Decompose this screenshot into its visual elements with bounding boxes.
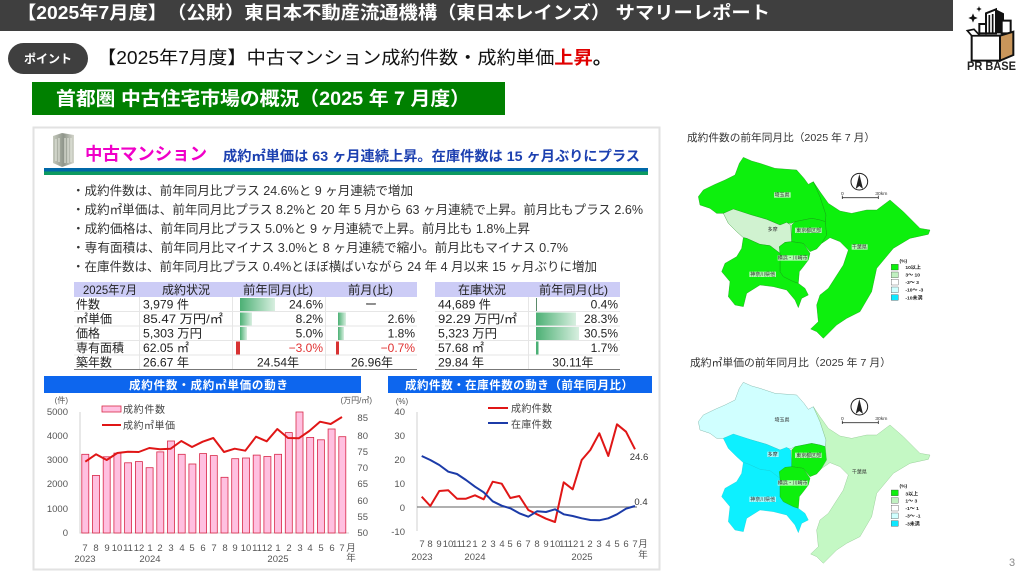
axis labels: 月 (638, 539, 648, 550)
chart: contracts and inventory year over year (388, 376, 652, 563)
axis labels: 2 (286, 543, 292, 554)
table: contract status: 築年数 (76, 354, 112, 370)
icon: north compass and scale (841, 173, 887, 199)
table: inventory status: 30.5% (584, 326, 618, 340)
icon: apartment building (53, 133, 74, 167)
point badge (8, 43, 88, 74)
axis labels: 11 (252, 543, 262, 554)
table: contract status: 2.6% (388, 312, 415, 326)
value labels: 0.4 (634, 497, 648, 508)
region names: 横浜・川崎市 (778, 480, 808, 487)
table: inventory status: 28.3% (584, 312, 618, 326)
region names: 神奈川県他 (750, 496, 775, 503)
region names: 横浜・川崎市 (778, 255, 808, 262)
panel heading: 中古マンション (85, 144, 207, 164)
axis labels: 70 (357, 463, 368, 474)
axis labels: 2025 (571, 552, 593, 563)
axis labels: 6 (200, 543, 206, 554)
axis labels: 1 (147, 543, 153, 554)
legend (488, 402, 552, 431)
table: contract status: −3.0% (289, 341, 323, 355)
region names: 埼玉県 (775, 417, 789, 424)
table: contract status: 26.96年 (351, 356, 393, 370)
axis labels: 2025 (267, 554, 289, 565)
map legend: (%) (899, 484, 908, 490)
map legend: 3～ 10 (905, 273, 920, 279)
table: contract status: 8.2% (296, 312, 323, 326)
table: contract status: 26.67 年 (143, 356, 189, 370)
axis labels: 30 (394, 431, 405, 442)
legend: 成約㎡単価 (123, 419, 175, 432)
axis labels: 12 (461, 539, 471, 550)
axis labels: 5 (189, 543, 195, 554)
page number: 3 (1009, 557, 1015, 569)
axis labels: 3 (168, 543, 174, 554)
value labels (630, 452, 648, 508)
axis labels: 年 (346, 552, 356, 564)
summary bullets: ・在庫件数は、前年同月比プラス 0.4%とほぼ横ばいながら 24 年 4 月以来 15 ヶ月ぶりに増加 (72, 259, 597, 274)
table: contract status: 2025年7月 (83, 283, 137, 297)
table: contract status: 62.05 ㎡ (143, 341, 189, 355)
summary bullets: ・専有面積は、前年同月比マイナス 3.0%と 8 ヶ月連続で縮小。前月比もマイナス 0.7% (72, 240, 568, 255)
chart heading (388, 376, 652, 393)
map legend: -3未満 (905, 520, 920, 527)
axis labels: 12 (262, 543, 272, 554)
table: inventory status: 44,689 件 (438, 298, 491, 312)
map legend: -10～ -3 (905, 288, 924, 294)
summary bullets: ・成約㎡単価は、前年同月比プラス 8.2%と 20 年 5 月から 63 ヶ月連続で上昇。前月比もプラス 2.6% (72, 202, 643, 217)
axis labels: 75 (357, 447, 368, 458)
axis labels: 2 (481, 539, 487, 550)
map legend (891, 259, 924, 301)
axis labels: 8 (534, 539, 540, 550)
section heading: 首都圏 中古住宅市場の概況（2025 年 7 月度） (56, 87, 470, 110)
axis labels: 6 (516, 539, 522, 550)
axis labels: 3 (596, 539, 602, 550)
table: inventory status: 前年同月(比) (539, 282, 608, 297)
axis labels: 8 (222, 543, 228, 554)
axis labels: 4 (179, 543, 185, 554)
icon: north compass and scale: 0 (841, 416, 844, 422)
axis labels: 7 (632, 539, 638, 550)
icon: north compass and scale: 30km (875, 416, 887, 422)
axis labels: 7 (525, 539, 531, 550)
axis labels: 12 (568, 539, 578, 550)
region: Yokohama and Kawasaki (779, 467, 810, 508)
axis labels: 5000 (47, 407, 68, 418)
legend: 在庫件数 (511, 418, 552, 431)
map: unit price change by region (698, 382, 930, 563)
table: contract status: 5,303 万円 (143, 326, 202, 340)
table: contract status: 専有面積 (76, 340, 124, 355)
axis labels: 2024 (139, 554, 161, 565)
axis labels: 3 (297, 543, 303, 554)
region names: 東京都区部 (796, 452, 821, 459)
axis labels (391, 397, 648, 563)
axis labels: 月 (346, 543, 356, 554)
region: Saitama (698, 382, 826, 450)
axis labels: 5 (614, 539, 620, 550)
region names: 多摩 (768, 451, 778, 458)
title bar: 【2025年7月度】（公財）東日本不動産流通機構（東日本レインズ） サマリーレポート (17, 2, 770, 23)
axis labels: 8 (427, 539, 433, 550)
table: contract status: 価格 (76, 326, 100, 340)
table: inventory status: 在庫状況 (458, 282, 506, 297)
chart heading: 成約件数・成約㎡単価の動き (129, 378, 288, 392)
summary bullets (72, 183, 643, 274)
axis labels: 5 (507, 539, 513, 550)
region: Kanagawa other (722, 238, 808, 308)
map legend: -10未満 (905, 294, 923, 301)
region: Tokyo wards (792, 218, 827, 252)
axis labels: 40 (394, 407, 405, 418)
axis labels: 65 (357, 479, 368, 490)
map legend: 3以上 (905, 490, 918, 497)
region names: 千葉県 (852, 469, 867, 476)
axis labels: 6 (329, 543, 335, 554)
table: contract status: 前年同月(比) (243, 282, 313, 297)
table: contract status: 前月(比) (348, 282, 393, 297)
region: Kanagawa other (722, 463, 808, 533)
axis labels: 11 (452, 539, 462, 550)
table: inventory status: 0.4% (591, 298, 618, 312)
axis labels: 4 (499, 539, 505, 550)
axis labels: 4 (307, 543, 313, 554)
legend (102, 403, 175, 432)
title bar (0, 0, 953, 31)
table: contract status: 3,979 件 (143, 298, 189, 312)
region names (749, 192, 868, 278)
axis labels: 2000 (47, 479, 68, 490)
axis labels: 2023 (74, 554, 96, 565)
logo: PR BASE: PR BASE (967, 61, 1016, 73)
legend: 成約件数 (123, 403, 165, 416)
chart: contracts and unit price (44, 376, 372, 565)
summary bullets: ・成約件数は、前年同月比プラス 24.6%と 9 ヶ月連続で増加 (72, 183, 413, 198)
axis labels: 2023 (411, 552, 433, 563)
map legend: 10以上 (905, 264, 921, 271)
table: contract status: −0.7% (381, 341, 415, 355)
region: Tama (723, 434, 792, 478)
axis labels: 7 (339, 543, 345, 554)
key point text: 【2025年7月度】中古マンション成約件数・成約単価 上昇。 (97, 48, 612, 68)
axis labels: -10 (391, 527, 405, 538)
line: contract count change (422, 424, 635, 522)
axis labels: 7 (419, 539, 425, 550)
axis labels: 10 (112, 543, 122, 554)
table: inventory status (435, 282, 620, 370)
panel heading: 成約㎡単価は 63 ヶ月連続上昇。在庫件数は 15 ヶ月ぶりにプラス (223, 148, 640, 164)
icon: north compass and scale: 30km (875, 191, 887, 197)
axis labels: 1000 (47, 504, 68, 515)
axis labels: 10 (443, 539, 453, 550)
line: unit price (85, 417, 342, 462)
axis labels: 5 (318, 543, 324, 554)
table: inventory status: 29.84 年 (438, 356, 484, 370)
panel: used condominium report (34, 128, 660, 570)
panel heading (44, 144, 648, 175)
chart heading (44, 376, 361, 393)
table: contract status: 24.54年 (257, 356, 299, 370)
map heading: unit price: 成約㎡単価の前年同月比（2025 年 7 月） (690, 356, 891, 369)
icon: north compass and scale (841, 398, 887, 424)
table: contract status: 1.8% (388, 326, 415, 340)
axis labels: 6 (623, 539, 629, 550)
axis labels: 2 (157, 543, 163, 554)
axis labels: 4000 (47, 431, 68, 442)
axis labels: 11 (559, 539, 569, 550)
icon: box with buildings (967, 6, 1013, 61)
axis labels: 12 (134, 543, 144, 554)
summary bullets: ・成約価格は、前年同月比プラス 5.0%と 9 ヶ月連続で上昇。前月比も 1.8%上昇 (72, 221, 530, 236)
bars: contract count (82, 412, 346, 533)
axis labels: 1 (275, 543, 281, 554)
table: contract status: ㎡単価 (76, 312, 112, 326)
axis labels: 3 (490, 539, 496, 550)
axis labels: (件) (55, 395, 68, 405)
axis labels: 7 (211, 543, 217, 554)
axis labels: 20 (394, 455, 405, 466)
legend: 成約件数 (511, 402, 552, 415)
region: Yokohama and Kawasaki (779, 242, 810, 283)
map: contract change by region (698, 157, 930, 338)
axis labels: (%) (396, 397, 409, 406)
region: Tama (723, 209, 792, 253)
axis labels: 0 (63, 528, 68, 539)
axis labels: 55 (357, 512, 368, 523)
table: contract status (74, 282, 417, 370)
region names: 東京都区部 (796, 227, 821, 234)
axis labels: 11 (123, 543, 133, 554)
map legend: 1～ 3 (905, 499, 917, 505)
axis labels: 2 (587, 539, 593, 550)
axis labels: 9 (436, 539, 442, 550)
region names: 多摩 (768, 226, 778, 233)
region names: 埼玉県 (775, 192, 789, 199)
axis labels: 3000 (47, 455, 68, 466)
axis labels: 年 (638, 549, 648, 561)
table: contract status: 5.0% (296, 326, 323, 340)
region names: 神奈川県他 (750, 271, 775, 278)
line: inventory change (422, 456, 635, 520)
table: inventory status: 5,323 万円 (438, 326, 497, 340)
table: inventory status: 92.29 万円/㎡ (438, 312, 517, 326)
region: Saitama (698, 157, 826, 225)
axis labels: 1 (472, 539, 478, 550)
axis labels: 0 (400, 503, 405, 514)
axis labels: 8 (93, 543, 99, 554)
logo: PR BASE (967, 6, 1016, 73)
axis labels: 7 (82, 543, 88, 554)
value labels: 24.6 (630, 452, 648, 463)
axis labels: 60 (357, 496, 368, 507)
axis labels: 9 (104, 543, 110, 554)
chart heading: 成約件数・在庫件数の動き（前年同月比） (405, 378, 633, 392)
axis labels: 1 (579, 539, 585, 550)
region: Tokyo wards (792, 443, 827, 477)
region names (749, 417, 867, 503)
table: inventory status: 30.11年 (552, 356, 594, 370)
table: contract status: 件数 (76, 296, 100, 312)
table: contract status: 85.47 万円/㎡ (143, 312, 223, 326)
region: Chiba (811, 182, 930, 338)
icon: north compass and scale: 0 (841, 191, 844, 197)
map legend: -3～ 3 (905, 280, 919, 286)
table: contract status: 24.6% (289, 298, 323, 312)
axis labels: 85 (357, 413, 368, 424)
axis labels (47, 395, 372, 565)
map legend: -3～ -1 (905, 513, 921, 519)
axis labels: 50 (357, 528, 368, 539)
map legend (891, 484, 921, 527)
axis labels: 10 (550, 539, 560, 550)
map heading: contracts: 成約件数の前年同月比（2025 年 7 月） (687, 131, 875, 144)
axis labels: 9 (543, 539, 549, 550)
region: Chiba (811, 407, 930, 563)
axis labels: 9 (232, 543, 238, 554)
table: inventory status: 1.7% (591, 341, 618, 355)
axis labels: 10 (241, 543, 251, 554)
axis labels: 4 (605, 539, 611, 550)
table: contract status: ー (365, 298, 377, 312)
axis labels: (万円/㎡) (340, 396, 372, 405)
table: contract status: 成約状況 (162, 282, 210, 297)
axis labels: 2024 (464, 552, 486, 563)
axis labels: 80 (357, 431, 368, 442)
region names: 千葉県 (852, 244, 867, 251)
map legend: -1～ 1 (905, 506, 919, 512)
axis labels: 10 (394, 479, 405, 490)
point badge: ポイント (24, 52, 72, 66)
map legend: (%) (899, 259, 908, 265)
section heading (32, 82, 505, 115)
table: inventory status: 57.68 ㎡ (438, 341, 484, 355)
